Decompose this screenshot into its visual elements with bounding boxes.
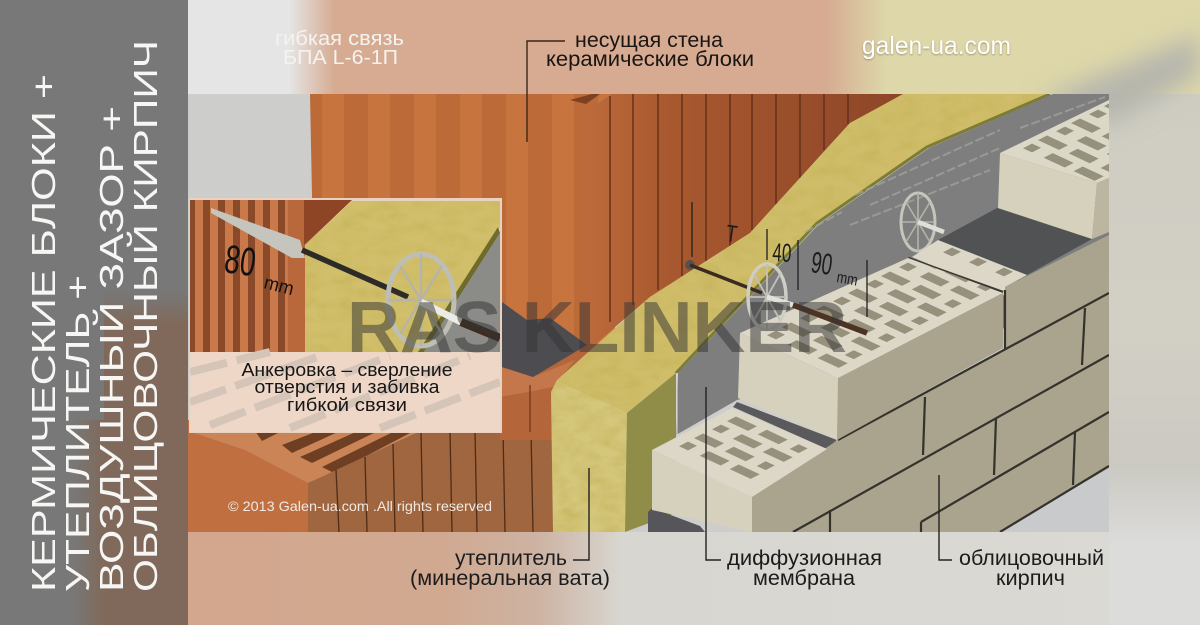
label: diffusion membrane: мембрана bbox=[753, 567, 855, 590]
vertical title bbox=[25, 40, 164, 592]
caption band bbox=[190, 352, 500, 432]
label: facing brick: кирпич bbox=[996, 567, 1065, 590]
inset caption: Анкеровка – сверление bbox=[242, 359, 452, 380]
facing brick wall side bbox=[751, 235, 1109, 532]
dimension 80 mm: mm bbox=[262, 272, 296, 300]
inset caption bbox=[242, 359, 452, 415]
dark mortar beds bbox=[938, 208, 1092, 275]
vertical title: КЕРМИЧЕСКИЕ БЛОКИ + bbox=[25, 74, 62, 592]
site name: galen-ua.com bbox=[862, 32, 1011, 60]
anchor dowel and washer bbox=[211, 208, 500, 346]
lower facing brick bbox=[652, 408, 827, 532]
label: flexible tie: гибкая связь bbox=[275, 27, 404, 50]
label: insulation: (минеральная вата) bbox=[410, 567, 610, 590]
diffusion membrane bbox=[676, 94, 1109, 435]
label: load-bearing wall bbox=[527, 29, 754, 142]
label: load-bearing wall: керамические блоки bbox=[546, 48, 754, 71]
wall anchor near with dimensions: mm bbox=[835, 269, 859, 290]
wall anchor near with dimensions: 90 bbox=[809, 246, 834, 282]
dimension 80 mm: 80 bbox=[222, 237, 259, 285]
lower block bbox=[188, 420, 313, 532]
label: facing brick: облицовочный bbox=[959, 547, 1104, 570]
wall anchor near with dimensions: T bbox=[724, 220, 739, 249]
wall anchor near with dimensions bbox=[685, 202, 867, 333]
vertical title: ОБЛИЦОВОЧНЫЙ КИРПИЧ bbox=[127, 40, 164, 592]
wall anchor far bbox=[901, 193, 944, 251]
label: facing brick bbox=[939, 475, 1104, 590]
label: insulation: утеплитель bbox=[455, 547, 567, 570]
mortar bed bbox=[502, 302, 587, 377]
ceramic block wall bbox=[188, 94, 905, 532]
top right facing brick bbox=[998, 100, 1109, 239]
label: flexible tie bbox=[275, 27, 404, 69]
main wall cross-section illustration bbox=[188, 94, 1185, 532]
vertical title: ВОЗДУШНЫЙ ЗАЗОР + bbox=[93, 106, 130, 592]
front upper facing brick bbox=[738, 254, 1003, 440]
inset caption: отверстия и забивка bbox=[254, 376, 440, 397]
label: load-bearing wall: несущая стена bbox=[575, 29, 723, 52]
inset: anchoring detail bbox=[189, 198, 502, 433]
wall anchor near with dimensions: 40 bbox=[772, 237, 792, 268]
watermark: RAS KLINKER bbox=[347, 288, 847, 368]
label: insulation bbox=[410, 468, 610, 590]
label: diffusion membrane bbox=[706, 387, 882, 590]
insulation mineral wool bbox=[551, 94, 1050, 532]
label: flexible tie: БПА L-6-1П bbox=[283, 46, 398, 69]
copyright: © 2013 Galen-ua.com .All rights reserved bbox=[228, 498, 492, 514]
vertical title: УТЕПЛИТЕЛЬ + bbox=[59, 275, 96, 592]
label: diffusion membrane: диффузионная bbox=[727, 547, 882, 570]
left title panel bbox=[0, 0, 188, 625]
inset caption: гибкой связи bbox=[287, 394, 407, 415]
dimension 80 mm bbox=[225, 245, 293, 295]
